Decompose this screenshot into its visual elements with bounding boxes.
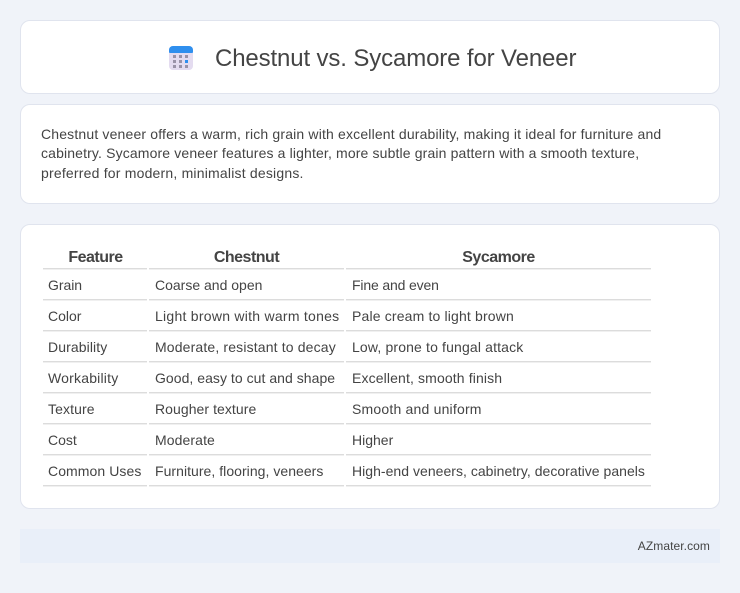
table: comparison: Rougher texture bbox=[155, 401, 256, 417]
footer bar bbox=[20, 529, 720, 563]
table: comparison: Good, easy to cut and shape bbox=[155, 370, 335, 386]
panel: title card bbox=[20, 20, 720, 94]
table: comparison: Smooth and uniform bbox=[352, 401, 482, 417]
table: comparison bbox=[43, 249, 651, 487]
table: comparison: Texture bbox=[48, 401, 95, 417]
table: comparison: Coarse and open bbox=[155, 277, 262, 293]
table: comparison: Fine and even bbox=[352, 277, 439, 293]
table: comparison: Chestnut bbox=[214, 249, 279, 266]
text block: description: preferred for modern, minimalist designs. bbox=[41, 165, 304, 181]
table: comparison: Durability bbox=[48, 339, 107, 355]
table: comparison: Low, prone to fungal attack bbox=[352, 339, 523, 355]
icon: calendar bbox=[169, 46, 193, 70]
table: comparison: Moderate bbox=[155, 432, 215, 448]
panel: comparison table bbox=[20, 224, 720, 509]
text block: description bbox=[41, 126, 661, 181]
table: comparison: Workability bbox=[48, 370, 118, 386]
table: comparison: Higher bbox=[352, 432, 393, 448]
title: Chestnut vs. Sycamore for Veneer bbox=[215, 45, 576, 72]
footer: source credit: AZmater.com bbox=[638, 539, 710, 553]
table: comparison: Moderate, resistant to decay bbox=[155, 339, 336, 355]
table: comparison: High-end veneers, cabinetry, decorative panels bbox=[352, 463, 645, 479]
table: comparison: Sycamore bbox=[462, 249, 535, 266]
text block: description: Chestnut veneer offers a warm, rich grain with excellent durability, making it ideal for furniture and bbox=[41, 126, 661, 142]
table: comparison: Cost bbox=[48, 432, 77, 448]
table: comparison: Pale cream to light brown bbox=[352, 308, 514, 324]
table: comparison: Furniture, flooring, veneers bbox=[155, 463, 323, 479]
table: comparison: Color bbox=[48, 308, 81, 324]
text block: description: cabinetry. Sycamore veneer features a lighter, more subtle grain pattern with a smooth texture, bbox=[41, 145, 639, 161]
panel: description bbox=[20, 104, 720, 204]
table: comparison: Feature bbox=[68, 249, 123, 266]
table: comparison: Common Uses bbox=[48, 463, 141, 479]
table: comparison: Grain bbox=[48, 277, 82, 293]
table: comparison: Light brown with warm tones bbox=[155, 308, 339, 324]
table: comparison: Excellent, smooth finish bbox=[352, 370, 502, 386]
